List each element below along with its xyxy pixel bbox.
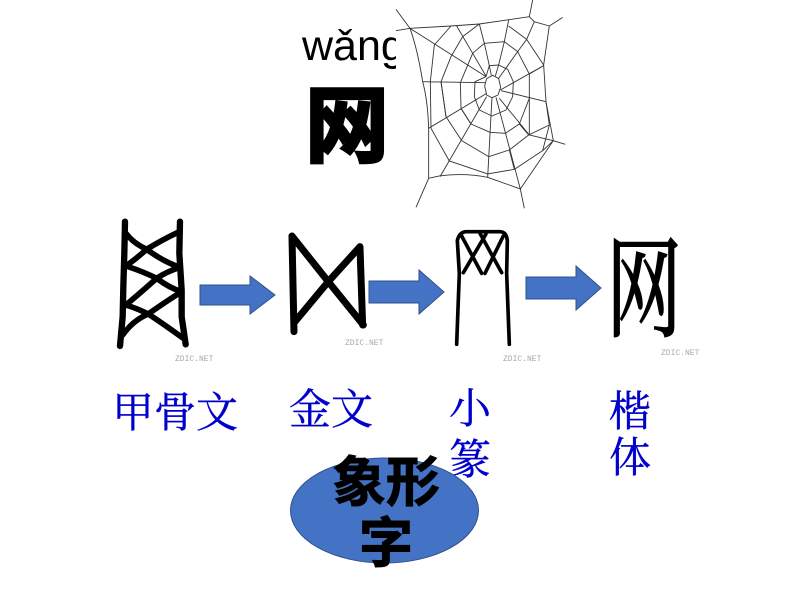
ellipse: pictograph badge xyxy=(290,458,478,563)
label: bronze script: 金文 xyxy=(289,388,373,434)
watermark labels: ZDIC.NET xyxy=(661,349,700,358)
label: small seal script: 小 xyxy=(449,387,492,433)
middle ring xyxy=(460,42,529,133)
glyph: oracle bone form xyxy=(120,222,186,346)
watermark labels: ZDIC.NET xyxy=(345,339,384,348)
label: regular script: 体 xyxy=(609,436,651,482)
main character: 网 xyxy=(306,80,388,173)
watermark labels xyxy=(175,339,700,364)
badge text: 字 xyxy=(359,514,413,574)
inner ring xyxy=(474,65,513,116)
label: oracle bone script: 甲骨文 xyxy=(112,391,238,437)
illustration: spider web xyxy=(396,0,573,210)
glyph: regular script form: 网 xyxy=(606,231,682,352)
badge text: 象形 xyxy=(332,453,440,513)
hub xyxy=(485,75,501,98)
watermark labels: ZDIC.NET xyxy=(503,355,542,364)
pinyin heading: wǎng xyxy=(301,22,405,70)
label: regular script xyxy=(609,390,651,482)
arrow 2 xyxy=(369,270,444,314)
glyph: bronze inscription form xyxy=(292,236,363,332)
arrow 1 xyxy=(200,276,275,314)
label: small seal script: 篆 xyxy=(449,438,491,484)
spokes xyxy=(410,20,553,189)
badge text xyxy=(332,453,440,574)
label: small seal script xyxy=(449,387,492,484)
outer rings xyxy=(431,66,553,174)
watermark labels: ZDIC.NET xyxy=(175,355,214,364)
frame xyxy=(396,17,553,189)
glyph: small seal form xyxy=(457,232,509,344)
label: regular script: 楷 xyxy=(609,390,651,436)
arrow 3 xyxy=(526,266,601,310)
